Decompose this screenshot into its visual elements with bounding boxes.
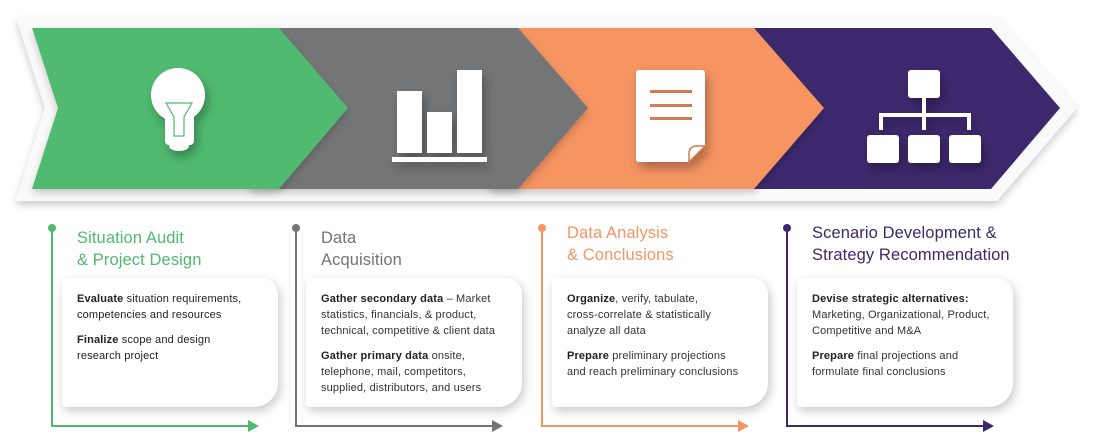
purple segment — [730, 28, 1060, 189]
card: data acquisition: supplied, distributors, and users — [321, 382, 481, 394]
card: scenario development: formulate final conclusions — [812, 366, 946, 378]
card: situation audit: Evaluate situation requirements, — [77, 293, 241, 305]
orange segment — [490, 28, 824, 189]
heading: data analysis: Data Analysis — [567, 224, 668, 242]
card: data acquisition: statistics, financials, & product, — [321, 309, 476, 321]
card: situation audit: research project — [77, 350, 158, 362]
card: situation audit: competencies and resources — [77, 309, 222, 321]
card: data acquisition — [306, 278, 522, 407]
panel: situation audit — [48, 224, 285, 432]
panel: data analysis — [538, 224, 775, 432]
heading: situation audit — [77, 229, 202, 269]
card: data analysis: Organize, verify, tabulate, — [567, 293, 698, 305]
icon: document — [636, 70, 705, 162]
heading: situation audit: Situation Audit — [77, 229, 184, 247]
card: data acquisition: Gather primary data onsite, — [321, 350, 465, 362]
icon: light bulb — [151, 68, 205, 151]
card: data analysis: Prepare preliminary projections — [567, 350, 726, 362]
green segment — [32, 28, 348, 189]
heading: situation audit: & Project Design — [77, 251, 202, 269]
card: data analysis: cross-correlate & statistically — [567, 309, 711, 321]
panel: scenario development — [783, 224, 1020, 432]
chevron banner — [14, 20, 1078, 208]
panel: data acquisition — [292, 224, 529, 432]
heading: data analysis: & Conclusions — [567, 246, 674, 264]
card: scenario development: Devise strategic alternatives: — [812, 293, 969, 305]
card: situation audit — [62, 278, 278, 407]
heading: data acquisition: Data — [321, 229, 356, 247]
heading: data acquisition — [321, 229, 402, 269]
card: scenario development — [797, 278, 1013, 407]
heading: scenario development — [812, 224, 1010, 264]
card: scenario development: Competitive and M&A — [812, 325, 921, 337]
heading: data acquisition: Acquisition — [321, 251, 402, 269]
heading: scenario development: Strategy Recommendation — [812, 246, 1010, 264]
card: situation audit: Finalize scope and design — [77, 334, 210, 346]
card: data analysis: analyze all data — [567, 325, 646, 337]
icon: bar chart — [392, 70, 487, 162]
card: scenario development: Prepare final projections and — [812, 350, 958, 362]
outer white chevron — [16, 17, 1077, 201]
card: data acquisition: technical, competitive & client data — [321, 325, 495, 337]
heading: data analysis — [567, 224, 674, 264]
card: scenario development: Marketing, Organizational, Product, — [812, 309, 990, 321]
icon: org chart — [867, 70, 981, 163]
card: data acquisition: telephone, mail, competitors, — [321, 366, 466, 378]
gray segment — [250, 28, 588, 189]
card: data analysis — [552, 278, 768, 407]
heading: scenario development: Scenario Development & — [812, 224, 997, 242]
card: data acquisition: Gather secondary data – Market — [321, 293, 491, 305]
card: data analysis: and reach preliminary conclusions — [567, 366, 738, 378]
